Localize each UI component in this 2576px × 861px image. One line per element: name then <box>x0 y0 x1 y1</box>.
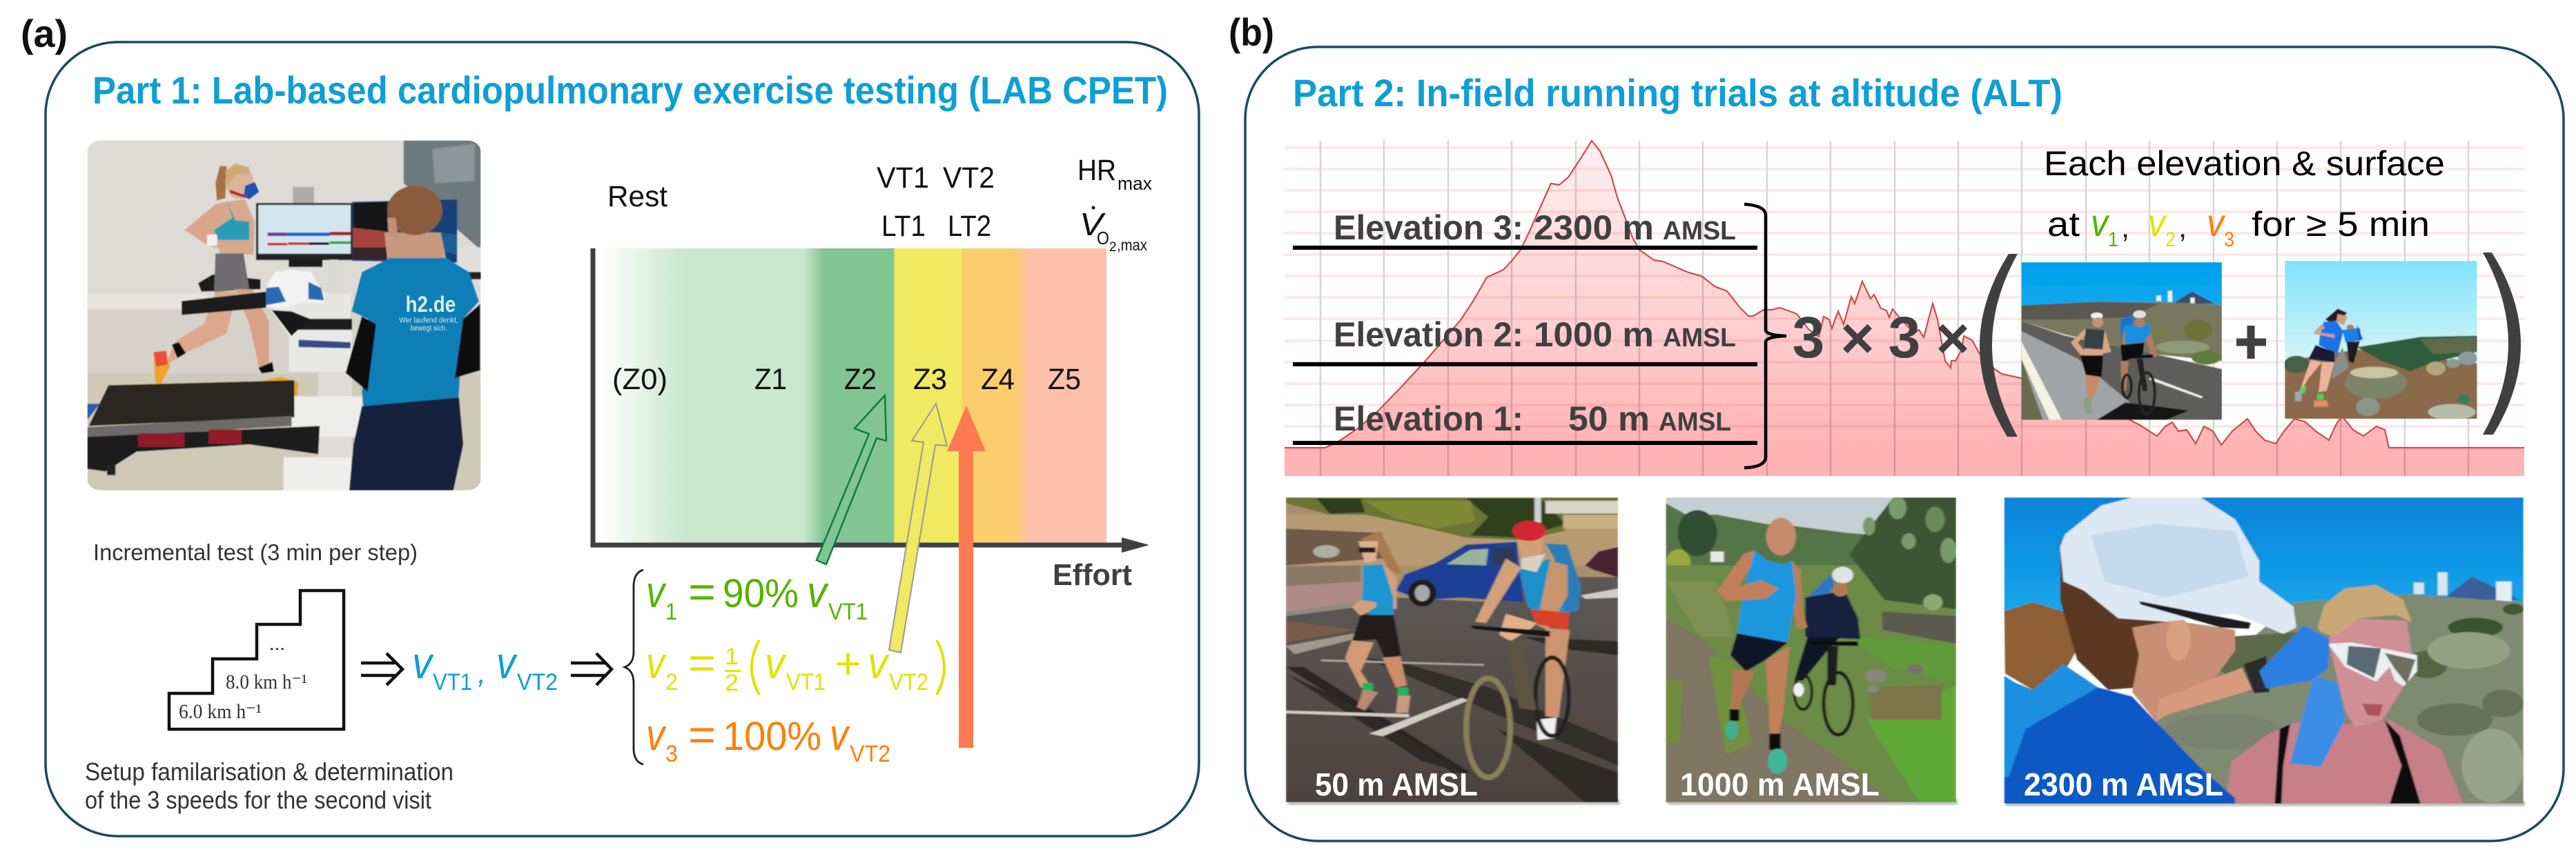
heading: part 1: Part 1: Lab-based cardiopulmonary exercise testing (LAB CPET) <box>92 68 1168 112</box>
label: VT2: VT2 <box>943 161 995 195</box>
label: elevation 2 <box>1334 315 1736 354</box>
label: VO2max: V <box>1080 206 1106 242</box>
label: VO2max: O <box>1097 228 1109 248</box>
caption: 1000 m AMSL: 1000 m AMSL <box>1680 766 1880 802</box>
label: elevation 3: Elevation 3: <box>1334 208 1523 247</box>
formula: v2: = <box>688 638 716 688</box>
formula: v2: 1 <box>725 644 739 670</box>
formula: v1 <box>646 567 868 625</box>
text: setup familiarisation: of the 3 speeds for the second visit <box>85 786 431 814</box>
text: setup familiarisation <box>85 758 453 814</box>
formula: v3: = <box>688 710 716 760</box>
formula: vVT1, vVT2 <box>412 638 558 695</box>
formula: v3: 3 <box>665 741 678 767</box>
label: VO2max <box>1080 206 1147 255</box>
arrow: implies 1 <box>361 653 402 685</box>
caption: 2300 m AMSL: 2300 m AMSL <box>2024 766 2223 802</box>
formula: v2: v <box>646 638 667 688</box>
big closing parenthesis <box>2483 253 2521 435</box>
multiplier: 3 x 3 x <box>1793 305 1970 370</box>
chart: elevation profile <box>1285 141 2524 476</box>
label: elevation 1: AMSL <box>1659 408 1731 437</box>
panel frame <box>46 42 1199 836</box>
label: LT1: LT1 <box>881 210 926 243</box>
label: VO2max: 2 <box>1109 240 1117 255</box>
horizontal grid <box>1285 148 2524 426</box>
zone labels: Z1 <box>754 363 787 396</box>
text: setup familiarisation: Setup familarisation & determination <box>85 758 453 786</box>
arrow: yellow to Z3 <box>889 404 947 653</box>
formula: v2 <box>646 638 944 696</box>
label: LT2: LT2 <box>948 210 991 243</box>
photo: 2300 m AMSL <box>2004 497 2525 806</box>
formula: v3: VT2 <box>850 741 890 767</box>
caption: 50 m AMSL: 50 m AMSL <box>1315 766 1478 802</box>
line: elevation 1 <box>1293 441 1757 445</box>
formula: vVT1, vVT2: VT2 <box>517 669 558 695</box>
label: HRmax: HR <box>1077 154 1116 187</box>
zone labels: Z2 <box>844 363 877 396</box>
panel frame <box>1245 47 2564 841</box>
formula: v3: v <box>646 710 667 760</box>
vertical grid <box>1320 141 2468 476</box>
label: elevation 2: AMSL <box>1663 324 1736 353</box>
line: elevation 3 <box>1293 246 1757 250</box>
label: elevation 1: Elevation 1: <box>1334 399 1523 438</box>
panel label (a): (a) <box>21 12 68 55</box>
text: speeds and duration <box>2047 201 2430 251</box>
text: each elevation and surface: Each elevation & surface <box>2044 144 2445 183</box>
text: speeds and duration: , <box>2178 210 2187 244</box>
label: Rest: Rest <box>607 180 667 213</box>
shirt lettering: h2.de <box>406 292 456 317</box>
icon: incremental staircase: 6.0 km h⁻¹ <box>179 700 262 723</box>
formula: v2: VT2 <box>889 669 928 695</box>
chart: intensity zones <box>593 154 1152 592</box>
icon: incremental staircase <box>169 591 344 729</box>
formula: vVT1, vVT2: v <box>412 638 435 688</box>
line: elevation 2 <box>1293 362 1757 366</box>
formula: v1: v <box>646 567 667 617</box>
label: VO2max: ,max <box>1117 236 1147 254</box>
axis arrowhead <box>1122 537 1149 553</box>
formula: v1: VT1 <box>828 599 868 625</box>
formula: v2: 2 <box>725 670 739 696</box>
text: speeds and duration: for ≥ 5 min <box>2252 205 2430 244</box>
label: elevation 3: AMSL <box>1663 217 1736 246</box>
photo: road surface inset <box>2021 262 2222 420</box>
photo: 50 m AMSL <box>1286 497 1620 805</box>
formula: v1: v <box>807 567 830 617</box>
plus sign <box>2236 326 2266 359</box>
photo: trail surface inset <box>2284 261 2477 420</box>
photo: runner on treadmill in lab: bewegt sich. <box>410 325 447 333</box>
text: speeds and duration: v <box>2207 201 2226 244</box>
right bracket <box>1744 204 1786 468</box>
zone labels <box>612 363 1081 396</box>
arrow: implies 2 <box>571 653 612 685</box>
formula: vVT1, vVT2: , <box>478 656 486 690</box>
elevation area <box>1285 141 2524 476</box>
brace <box>625 570 643 764</box>
formula: v2: v <box>765 638 788 688</box>
elevation outline <box>1285 141 2524 448</box>
label: elevation 2: Elevation 2: <box>1334 315 1523 354</box>
formula: v1: 90% <box>723 571 799 616</box>
formula: vVT1, vVT2: v <box>496 638 518 688</box>
text: speeds and duration: 2 <box>2165 228 2176 251</box>
label: HRmax: max <box>1118 173 1152 194</box>
multiplier: 3 x 3 x: × <box>1840 306 1875 370</box>
zone labels: Z5 <box>1048 363 1081 396</box>
text: speeds and duration: 3 <box>2224 228 2234 251</box>
label: HRmax <box>1077 154 1152 194</box>
formula: v3 <box>646 710 890 767</box>
zone labels: (Z0) <box>612 363 667 396</box>
formula: v3: v <box>830 710 850 760</box>
label: VT1: VT1 <box>877 161 929 195</box>
zone labels: Z3 <box>913 363 947 396</box>
arrow: orange to Z3/Z4 boundary <box>947 406 986 748</box>
icon: incremental staircase: ... <box>269 634 285 654</box>
formula: v2: + <box>835 640 861 688</box>
multiplier: 3 x 3 x: 3 <box>1793 305 1824 370</box>
label: elevation 1: 50 m <box>1568 399 1650 438</box>
heading: part 2: Part 2: In-field running trials at altitude (ALT) <box>1293 71 2062 115</box>
formula: v2: 2 <box>665 669 678 695</box>
text: incremental test: Incremental test (3 min per step) <box>93 540 418 565</box>
formula: v1: 1 <box>665 599 677 625</box>
photo: 1000 m AMSL <box>1666 496 1958 805</box>
big opening parenthesis <box>1980 254 2018 437</box>
photo: runner on treadmill in lab: Wer laufend denkt, <box>399 317 458 325</box>
panel: Part 1 lab-based testing <box>46 42 1199 836</box>
formula: v3: 100% <box>723 714 821 759</box>
formula: v1: = <box>688 567 716 617</box>
text: speeds and duration: 1 <box>2108 228 2118 251</box>
label: elevation 1 <box>1334 399 1731 438</box>
icon: incremental staircase: 8.0 km h⁻¹ <box>226 671 307 693</box>
text: speeds and duration: v <box>2091 201 2110 244</box>
panel: Part 2 in-field trials <box>1245 47 2564 841</box>
multiplier: 3 x 3 x: × <box>1935 306 1970 370</box>
formula: v2: v <box>868 638 890 688</box>
arrow: green to Z2 <box>817 395 886 564</box>
text: speeds and duration: at <box>2047 205 2080 244</box>
text: speeds and duration: v <box>2148 201 2167 244</box>
label: elevation 2: 1000 m <box>1534 315 1654 354</box>
panel label (b): (b) <box>1229 10 1274 54</box>
text: speeds and duration: , <box>2121 210 2129 244</box>
zones gradient <box>596 248 1106 543</box>
label: elevation 3: 2300 m <box>1534 208 1654 247</box>
label: elevation 3 <box>1334 208 1736 247</box>
photo: runner on treadmill in lab <box>88 141 482 491</box>
label: Effort: Effort <box>1053 558 1132 592</box>
zone labels: Z4 <box>981 363 1015 396</box>
formula: vVT1, vVT2: VT1 <box>433 669 472 695</box>
multiplier: 3 x 3 x: 3 <box>1889 305 1920 370</box>
formula: v2: VT1 <box>786 669 826 695</box>
y axis and effort axis <box>593 248 1132 545</box>
